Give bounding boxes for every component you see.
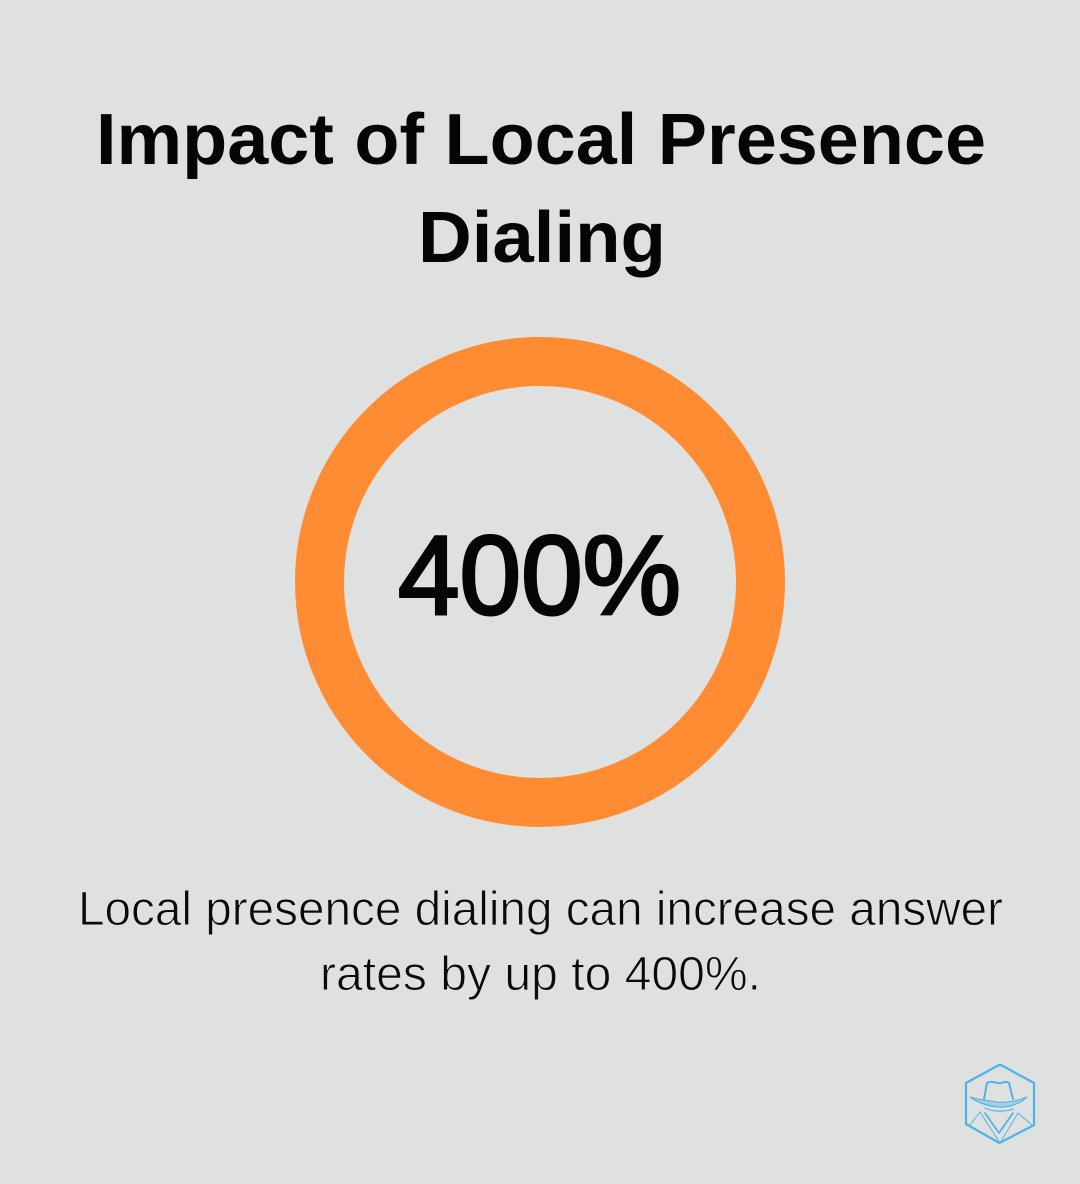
- description text: [78, 883, 1003, 1001]
- title: Impact of Local Presence: [96, 100, 986, 180]
- icon: hexagon logo with hat and spy figure: [966, 1064, 1034, 1143]
- big number: 400%: [398, 513, 681, 638]
- description text: rates by up to 400%.: [320, 948, 761, 1001]
- ring chart: 400%: [320, 362, 760, 802]
- title: [96, 100, 986, 278]
- title: Dialing: [418, 198, 666, 278]
- description text: Local presence dialing can increase answer: [78, 883, 1003, 936]
